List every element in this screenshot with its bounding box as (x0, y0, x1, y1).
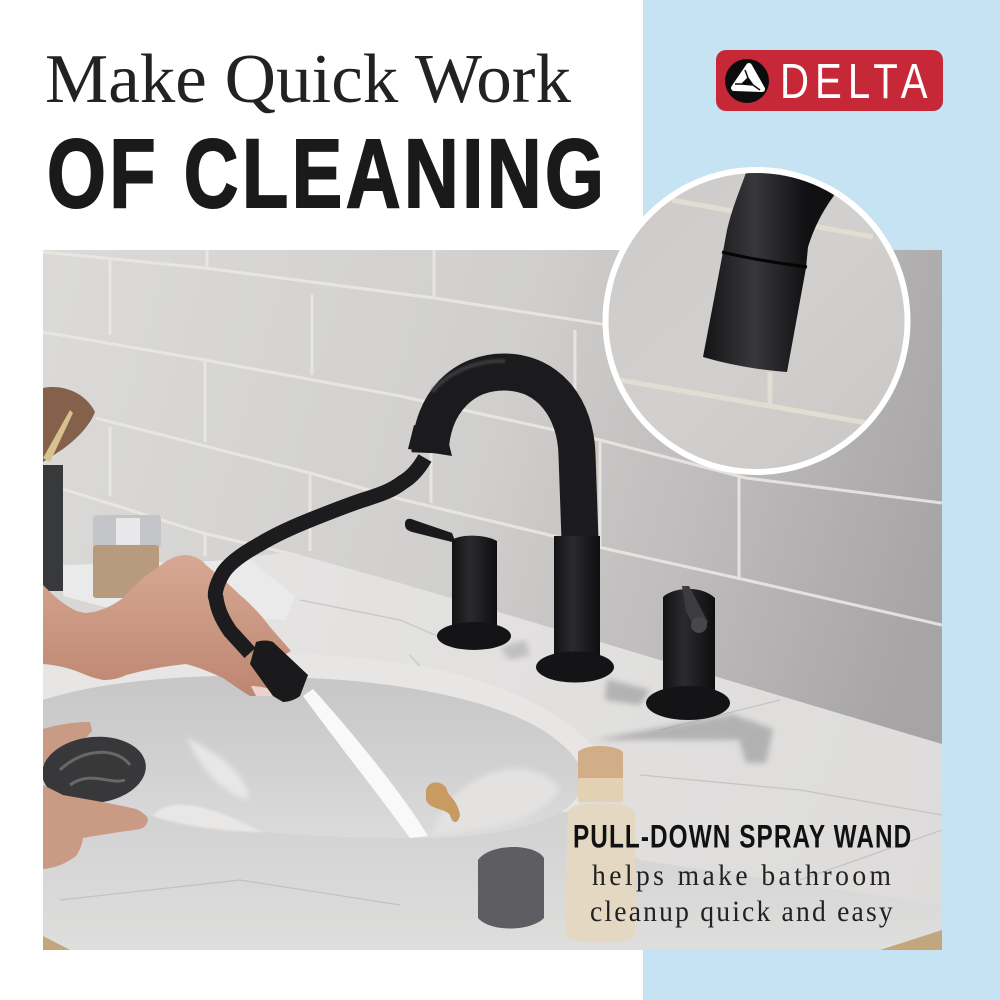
caption (573, 819, 911, 928)
hand holding spray wand (43, 555, 291, 696)
sink basin (43, 666, 578, 838)
brand name: DELTA (780, 54, 928, 109)
spray hose (215, 458, 425, 653)
inset circle: spray head close-up (600, 167, 912, 480)
cap (478, 847, 544, 928)
tray and jar (63, 515, 295, 620)
title line 1: Make Quick Work (45, 41, 571, 118)
icon: delta logo mark (725, 59, 769, 103)
title line 2: OF CLEANING (47, 120, 604, 228)
foundation bottle (565, 746, 635, 942)
faucet shadows on counter (594, 679, 773, 763)
second hand holding sponge (39, 722, 149, 869)
water stream (303, 689, 428, 838)
caption line 2: cleanup quick and easy (590, 895, 893, 928)
caption line 1: helps make bathroom (592, 859, 891, 892)
photo: faucet in bathroom (39, 250, 942, 950)
spray wand head (250, 640, 308, 702)
main faucet (408, 361, 614, 682)
panel: blue side background (643, 0, 1000, 1000)
makeup brushes (43, 387, 95, 591)
left handle (405, 519, 511, 650)
right handle (646, 586, 730, 720)
wood edges (43, 930, 942, 950)
marble counter (43, 552, 942, 950)
logo: Delta badge (716, 50, 943, 111)
caption heading: PULL-DOWN SPRAY WAND (573, 819, 911, 855)
tile wall (43, 250, 942, 760)
